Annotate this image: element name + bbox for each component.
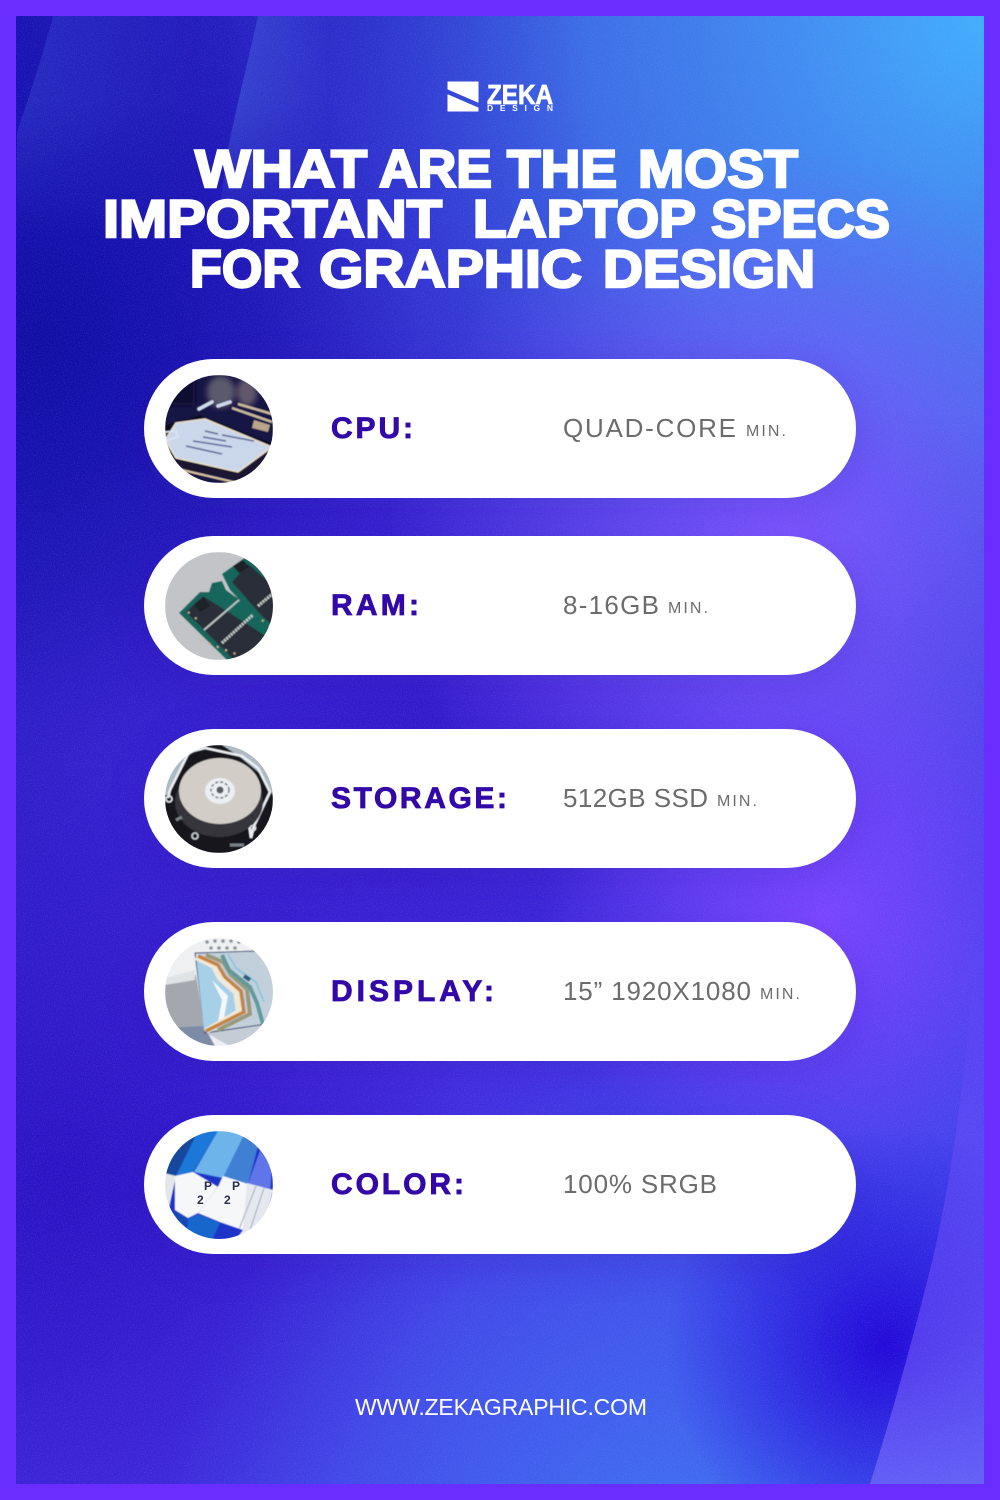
value: RAM: 8-16GB (563, 590, 659, 620)
title: THE (507, 140, 617, 199)
label: CPU: CPU: (331, 412, 413, 445)
swatch labels: 2 (197, 1193, 204, 1207)
title: WHAT (195, 140, 367, 199)
label: color: COLOR: (331, 1168, 464, 1201)
footer url: WWW.ZEKAGRAPHIC.COM (355, 1394, 647, 1420)
icon: color swatches photo (160, 1131, 273, 1240)
logo wordmark: ZEKA (487, 79, 553, 110)
unit: CPU: MIN. (746, 423, 786, 440)
value: display: 15” 1920X1080 (563, 976, 751, 1006)
card: storage (144, 729, 856, 878)
title: MOST (638, 140, 798, 199)
logo (448, 79, 553, 113)
card: RAM (144, 536, 856, 685)
value: storage: 512GB SSD (563, 783, 708, 813)
label: RAM: RAM: (331, 589, 419, 622)
title: GRAPHIC (319, 240, 582, 299)
icon: hard drive photo (165, 745, 273, 853)
title (103, 140, 890, 299)
unit: storage: MIN. (717, 793, 757, 810)
swatch labels: 2 (224, 1193, 231, 1207)
title: IMPORTANT (103, 190, 442, 249)
logo subtitle: DESIGN (487, 103, 553, 113)
title: SPECS (711, 190, 890, 249)
card: display (144, 922, 856, 1071)
icon: CPU photo (165, 375, 274, 483)
swatch labels: P (204, 1179, 212, 1193)
logo mark (448, 82, 478, 111)
icon: RAM photo (165, 552, 273, 660)
title: ARE (379, 140, 492, 199)
title: LAPTOP (473, 190, 696, 249)
swatch labels (197, 1182, 240, 1204)
label: display: DISPLAY: (331, 975, 494, 1008)
unit: display: MIN. (760, 986, 800, 1003)
icon: laptop display photo (165, 938, 280, 1046)
title: FOR (190, 240, 300, 299)
value: color: 100% SRGB (563, 1169, 717, 1199)
card: color (144, 1115, 856, 1264)
card: CPU (144, 359, 856, 508)
label: storage: STORAGE: (331, 782, 507, 815)
title: DESIGN (603, 240, 815, 299)
value: CPU: QUAD-CORE (563, 413, 736, 443)
unit: RAM: MIN. (668, 600, 708, 617)
swatch labels: P (232, 1179, 240, 1193)
